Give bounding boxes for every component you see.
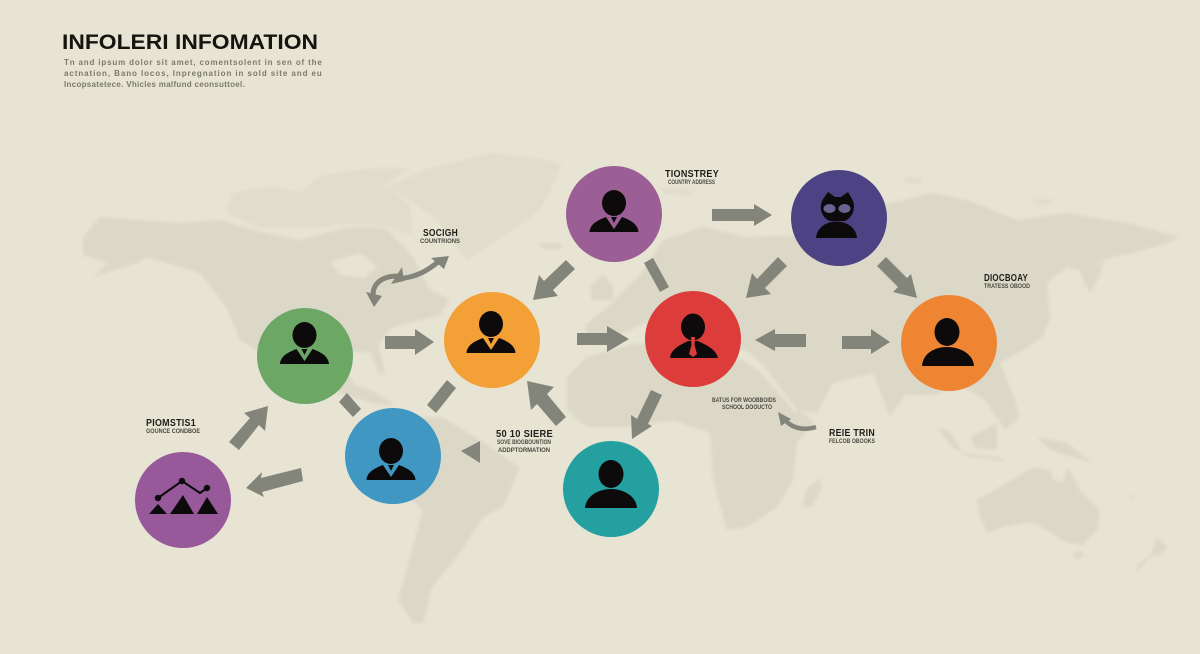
node: navy <box>791 170 887 266</box>
label: dioeboay: TRATESS OBOOD <box>984 284 1031 290</box>
node: green <box>257 308 353 404</box>
label: 50 10 siere: ADDPTORMATION <box>498 448 550 454</box>
node: purple <box>566 166 662 262</box>
intro text: Tn and ipsum dolor sit amet, comentsolent in sen of the <box>64 58 322 67</box>
arrow: green to yellow <box>385 329 434 355</box>
intro text <box>64 58 322 89</box>
title: INFOLERI INFOMATION <box>62 31 318 54</box>
label: piomstis1 <box>146 418 200 435</box>
label: piomstis1: PIOMSTIS1 <box>146 418 196 429</box>
label: tionstrey: TIONSTREY <box>665 169 719 180</box>
intro text: actnation, Bano locos, Inpregnation in sold site and eu <box>64 69 322 78</box>
label: center note <box>712 398 776 411</box>
arrow: navy to red <box>746 257 787 298</box>
label: tionstrey: COUNTRY ADDRESS <box>668 180 715 186</box>
arrow: purple to yellow <box>533 260 575 300</box>
icon: mountain chart <box>149 478 218 514</box>
arrow: to purple chart <box>246 468 303 497</box>
arrow: right-pointing to orange <box>842 329 890 354</box>
label: socigh: SOCIGH <box>423 228 458 239</box>
node: teal <box>563 441 659 537</box>
label: dioeboay <box>984 273 1031 290</box>
label: socigh: COUNTRIONS <box>420 239 460 245</box>
label: socigh <box>420 228 460 245</box>
curved arrow: social <box>366 256 449 307</box>
icon: masked figure <box>816 192 857 238</box>
label: reie trin <box>829 428 875 445</box>
label: reie trin: FELCOB OBOOKS <box>829 439 875 445</box>
node: purple chart <box>135 452 231 548</box>
arrow: purple to navy <box>712 204 772 226</box>
label: 50 10 siere: 50 10 SIERE <box>496 429 553 440</box>
intro text: Incopsatetece. Vhicles malfund ceonsuttoel. <box>64 80 245 89</box>
label: tionstrey <box>665 169 719 186</box>
label: reie trin: REIE TRIN <box>829 428 875 439</box>
arrow: purple chart to green <box>229 406 268 450</box>
label: center note: SCHOOL DOOUCTO <box>722 405 772 411</box>
arrow: left-pointing to red <box>755 329 806 351</box>
node: orange <box>901 295 997 391</box>
connector: green to blue <box>339 393 361 417</box>
curved arrow: bottom right <box>778 412 816 429</box>
arrow: navy to orange right <box>877 257 917 298</box>
arrow: small left triangle <box>461 441 480 463</box>
node: red <box>645 291 741 387</box>
node: blue <box>345 408 441 504</box>
connector: purple to red <box>644 258 669 292</box>
label: 50 10 siere: SOVE BIOGBOUNTION <box>497 440 551 446</box>
label: piomstis1: GOUNCE CONDBOE <box>146 429 200 435</box>
label: center note: BATUS FOR WOOBBOIDS <box>712 398 776 404</box>
connector: blue to yellow <box>427 380 456 413</box>
arrow: red to teal <box>631 390 662 439</box>
label: dioeboay: DIOCBOAY <box>984 273 1028 284</box>
world map <box>83 153 1180 623</box>
arrow: teal to yellow <box>527 381 566 426</box>
label: 50 10 siere <box>496 429 553 454</box>
node: yellow-orange <box>444 292 540 388</box>
arrow: yellow to red <box>577 326 629 352</box>
